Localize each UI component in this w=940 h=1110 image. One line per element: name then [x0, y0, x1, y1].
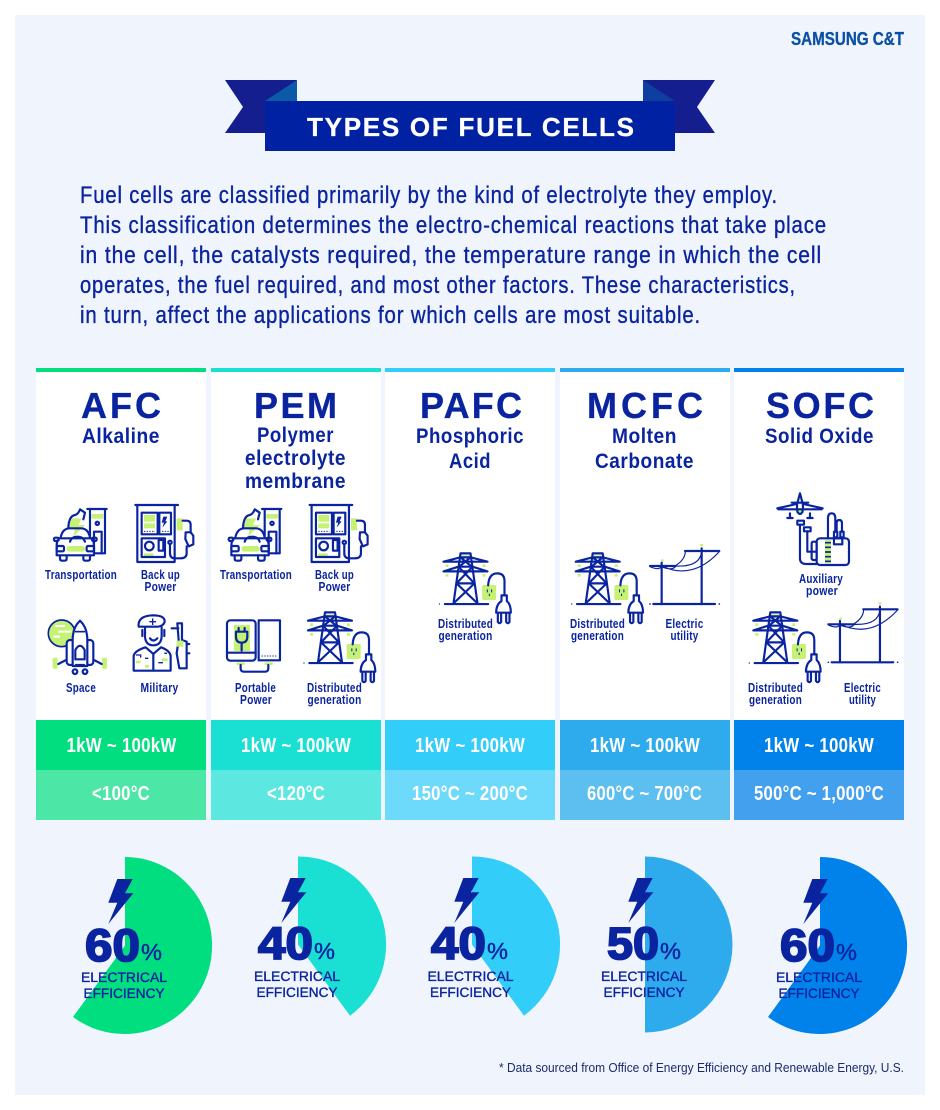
label: Back up Power: Power	[144, 580, 176, 594]
subtitle: Molten Carbonate	[595, 424, 694, 473]
panel: MCFC column	[560, 368, 730, 820]
label: Space: Space	[66, 681, 96, 695]
value: 60	[85, 920, 140, 971]
label: Back up Power	[141, 568, 180, 594]
label: Electric utility: utility	[849, 693, 876, 707]
value	[258, 918, 335, 969]
label: Distributed generation	[438, 617, 493, 643]
subtitle: Phosphoric Acid: Acid	[449, 449, 491, 473]
label: Back up Power	[315, 568, 354, 594]
value	[85, 920, 162, 971]
title text: TYPES OF FUEL CELLS	[307, 112, 634, 142]
icon: transportation	[54, 509, 107, 561]
subtitle: Polymer electrolyte membrane	[245, 423, 346, 493]
label: Back up Power: Back up	[141, 568, 180, 582]
label: Distributed generation	[748, 681, 803, 707]
power band	[734, 720, 904, 770]
temperature band	[734, 770, 904, 820]
caption: EFFICIENCY	[778, 986, 860, 1001]
icon: distributed generation	[749, 612, 821, 682]
label: Military: Military	[140, 681, 178, 695]
logo: Samsung C&T: SAMSUNG C&T	[791, 29, 904, 49]
icon: bolt	[281, 878, 306, 923]
value	[431, 918, 508, 969]
value: 50	[607, 918, 659, 969]
temperature band	[560, 770, 730, 820]
label: Auxiliary power: Auxiliary	[799, 572, 843, 586]
label: Electric utility: utility	[670, 629, 698, 643]
power band	[385, 720, 555, 770]
heading: PEM: PEM	[254, 385, 337, 426]
value: 60	[780, 920, 835, 971]
label: Back up Power: Power	[318, 580, 350, 594]
heading: AFC: AFC	[81, 385, 161, 426]
caption: ELECTRICAL	[601, 969, 688, 984]
label: Electric utility: Electric	[844, 681, 881, 695]
label: Distributed generation: generation	[308, 693, 362, 707]
panel: PEM column	[211, 368, 381, 820]
icon: distributed generation	[439, 553, 511, 623]
label: Distributed generation: generation	[749, 693, 802, 707]
icon: portable power	[227, 620, 280, 672]
power band	[560, 720, 730, 770]
caption: ELECTRICAL	[81, 970, 168, 985]
pie chart: PEM 40%	[254, 856, 386, 1016]
caption	[601, 969, 688, 1000]
label: Distributed generation: generation	[571, 629, 624, 643]
value: 40	[258, 918, 313, 969]
caption	[776, 970, 863, 1001]
temperature band: <120°C	[267, 783, 325, 805]
label: Distributed generation	[307, 681, 362, 707]
temperature band	[36, 770, 206, 820]
icon: space	[48, 620, 107, 674]
value: %	[836, 939, 857, 965]
label: Distributed generation	[570, 617, 625, 643]
label: Back up Power: Back up	[315, 568, 354, 582]
temperature band: 500°C ~ 1,000°C	[754, 783, 884, 805]
icon: transportation	[229, 509, 281, 561]
caption: EFFICIENCY	[84, 986, 164, 1001]
temperature band: 600°C ~ 700°C	[587, 783, 702, 805]
power band: 1kW ~ 100kW	[66, 735, 176, 757]
power band	[211, 720, 381, 770]
temperature band: 150°C ~ 200°C	[412, 783, 528, 805]
subtitle: Alkaline: Alkaline	[82, 424, 160, 448]
label: Portable Power: Power	[240, 693, 272, 707]
subtitle: Phosphoric Acid: Phosphoric	[416, 424, 524, 448]
heading: SOFC: SOFC	[766, 385, 874, 426]
label: Electric utility	[844, 681, 881, 707]
intro paragraph: operates, the fuel required, and most other factors. These characteristics,	[80, 272, 796, 299]
label: Distributed generation: Distributed	[307, 681, 362, 695]
caption: EFFICIENCY	[430, 985, 511, 1000]
icon: military	[134, 615, 189, 671]
label: Transportation: Transportation	[45, 568, 117, 582]
value	[780, 920, 857, 971]
subtitle: Polymer electrolyte membrane: membrane	[245, 469, 346, 493]
value: %	[141, 939, 162, 965]
pie chart: PAFC 40%	[428, 856, 560, 1016]
subtitle: Polymer electrolyte membrane: electrolyte	[245, 446, 346, 470]
caption	[428, 969, 514, 1000]
temperature band: <100°C	[92, 783, 150, 805]
power band: 1kW ~ 100kW	[764, 735, 874, 757]
pie chart: AFC 60%	[73, 857, 212, 1034]
icon: distributed generation	[303, 612, 375, 682]
subtitle: Phosphoric Acid	[416, 424, 524, 473]
label: Distributed generation: Distributed	[570, 617, 625, 631]
label: Portable Power: Portable	[235, 681, 276, 695]
temperature band	[385, 770, 555, 820]
label: Distributed generation: generation	[438, 629, 492, 643]
heading: MCFC: MCFC	[587, 385, 703, 426]
icon: electric utility	[827, 602, 898, 663]
intro paragraph: This classification determines the electro-chemical reactions that take place	[80, 212, 827, 239]
value: %	[660, 938, 681, 964]
label: Electric utility: Electric	[666, 617, 704, 631]
icon: bolt	[803, 879, 828, 924]
icon: bolt	[108, 879, 133, 924]
caption: ELECTRICAL	[254, 969, 341, 984]
subtitle: Solid Oxide: Solid Oxide	[765, 424, 874, 448]
power band: 1kW ~ 100kW	[590, 735, 700, 757]
icon: back up power	[135, 505, 193, 562]
intro paragraph	[80, 182, 827, 329]
caption: EFFICIENCY	[604, 985, 684, 1000]
value: 40	[431, 918, 486, 969]
temperature band	[211, 770, 381, 820]
label: Portable Power	[235, 681, 276, 707]
caption	[254, 969, 341, 1000]
caption: ELECTRICAL	[428, 969, 514, 984]
caption	[81, 970, 168, 1001]
icon: bolt	[454, 878, 479, 923]
label: Electric utility	[666, 617, 704, 643]
panel: SOFC column	[734, 368, 904, 820]
subtitle: Polymer electrolyte membrane: Polymer	[257, 423, 334, 447]
heading: PAFC: PAFC	[420, 385, 522, 426]
title ribbon	[225, 80, 715, 151]
panel: PAFC column	[385, 368, 555, 820]
icon: distributed generation	[571, 553, 643, 623]
subtitle: Molten Carbonate: Molten	[612, 424, 677, 448]
label: Auxiliary power	[799, 572, 843, 598]
footnote: * Data sourced from Office of Energy Efficiency and Renewable Energy, U.S.	[499, 1061, 904, 1075]
power band: 1kW ~ 100kW	[241, 735, 351, 757]
label: Auxiliary power: power	[806, 584, 838, 598]
icon: back up power	[310, 505, 368, 562]
value	[607, 918, 681, 969]
value: %	[487, 938, 508, 964]
power band	[36, 720, 206, 770]
intro paragraph: Fuel cells are classified primarily by the kind of electrolyte they employ.	[80, 182, 778, 209]
label: Distributed generation: Distributed	[438, 617, 493, 631]
label: Distributed generation: Distributed	[748, 681, 803, 695]
icon: auxiliary power	[777, 493, 849, 565]
caption: ELECTRICAL	[776, 970, 863, 985]
pie chart: SOFC 60%	[768, 857, 907, 1034]
subtitle: Molten Carbonate: Carbonate	[595, 449, 694, 473]
power band: 1kW ~ 100kW	[415, 735, 525, 757]
label: Transportation: Transportation	[220, 568, 292, 582]
caption: EFFICIENCY	[256, 985, 338, 1000]
intro paragraph: in turn, affect the applications for which cells are most suitable.	[80, 302, 701, 329]
value: %	[314, 938, 335, 964]
icon: bolt	[628, 878, 653, 923]
panel: AFC column	[36, 368, 206, 820]
icon: electric utility	[649, 544, 720, 605]
pie chart: MCFC 50%	[601, 856, 732, 1032]
intro paragraph: in the cell, the catalysts required, the temperature range in which the cell	[80, 242, 822, 269]
